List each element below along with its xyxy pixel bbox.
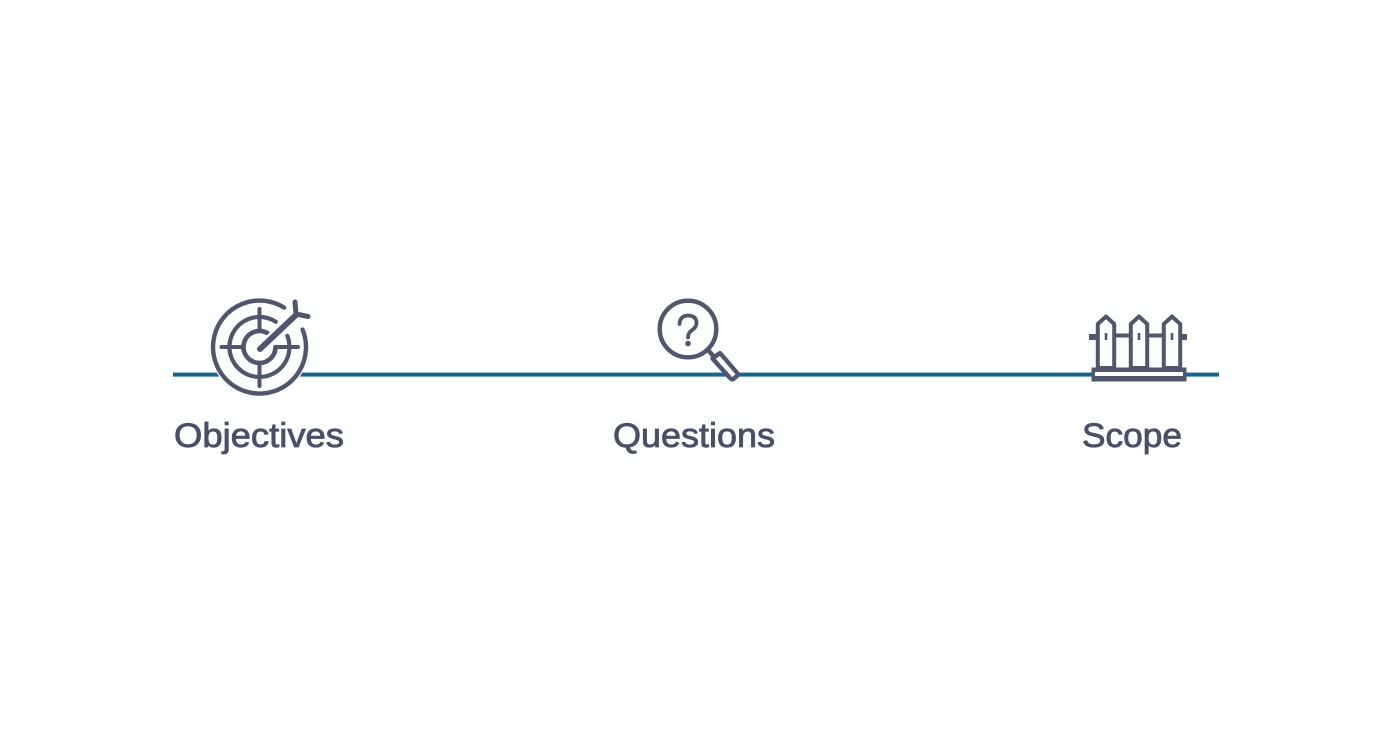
label: Objectives: Objectives <box>174 417 344 455</box>
icon: magnifying glass with question mark <box>660 301 738 379</box>
column: objectives <box>174 297 344 455</box>
fence base highlight <box>1095 372 1183 376</box>
column: questions <box>613 301 775 455</box>
column: scope <box>1082 316 1187 455</box>
icon: picket fence <box>1089 316 1187 382</box>
label: Scope: Scope <box>1082 417 1182 455</box>
label: Questions: Questions <box>613 417 775 455</box>
icon: target with arrow <box>210 297 310 397</box>
timeline line <box>173 373 1219 377</box>
